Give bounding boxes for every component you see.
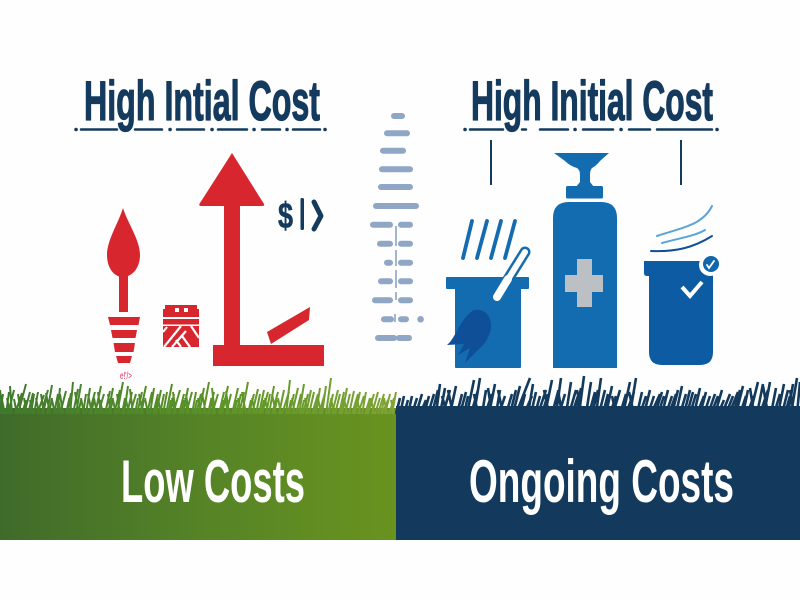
label: low costs: Low Costs xyxy=(121,448,305,515)
connector lines xyxy=(491,140,681,185)
panel: low costs xyxy=(0,378,396,540)
icon: dollar sign and chevron: $ xyxy=(278,195,293,236)
icon: red plant in striped pot xyxy=(107,208,140,382)
icon: red patterned block xyxy=(163,305,199,347)
icon: blue container with check badge xyxy=(644,206,721,365)
center divider: dashed bar column xyxy=(373,116,421,338)
grass: navy xyxy=(396,376,800,414)
icon: red plant in striped pot: e!'/> xyxy=(120,371,132,382)
grass: green xyxy=(0,378,396,414)
icon: blue bucket with brush xyxy=(446,221,529,368)
panel: ongoing costs xyxy=(396,376,800,540)
left heading: High Intial Cost xyxy=(84,69,320,132)
icon: large red up arrow with base xyxy=(199,153,324,366)
icon: blue gas cylinder with cross xyxy=(553,153,617,368)
icon: dollar sign and chevron xyxy=(278,195,321,236)
